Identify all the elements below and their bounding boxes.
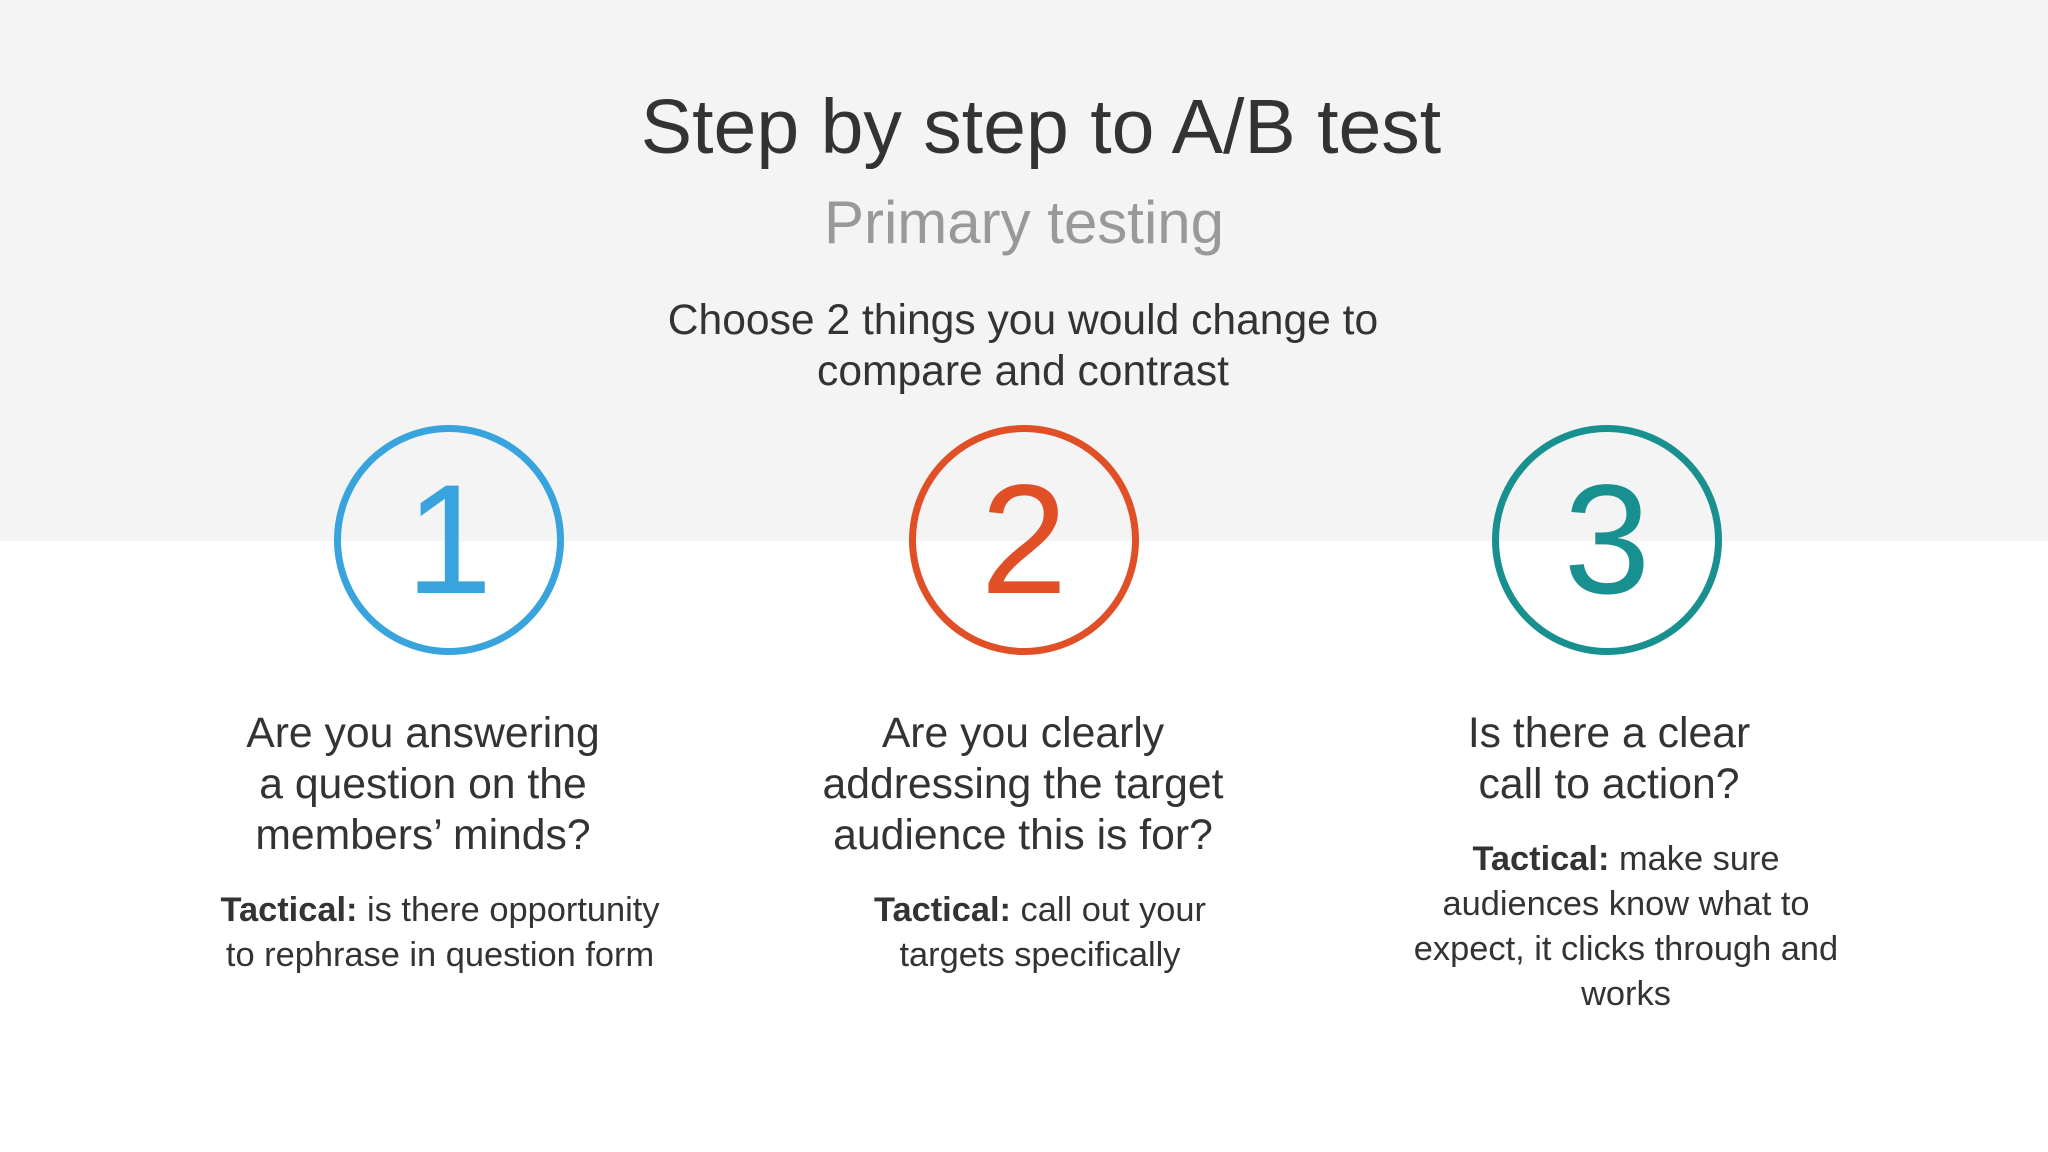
step 1 question: a question on the [259, 760, 587, 808]
step 1 question: Are you answering [246, 709, 600, 757]
step 2 circle [909, 425, 1139, 655]
step 3 circle [1492, 425, 1722, 655]
step 3 question: call to action? [1478, 760, 1740, 808]
step 3 tactical [1414, 840, 1838, 1013]
step 1 tactical: Tactical: is there opportunity [220, 891, 660, 929]
step 1 question: members’ minds? [255, 811, 591, 859]
step 3 tactical: works [1581, 975, 1671, 1013]
step 1 tactical [220, 891, 660, 974]
step 2 tactical: Tactical: call out your [874, 891, 1206, 929]
step 3 tactical: expect, it clicks through and [1414, 930, 1838, 968]
step 3 tactical: audiences know what to [1442, 885, 1810, 923]
step 3 question: Is there a clear [1468, 709, 1750, 757]
step 3 circle: 3 [1564, 453, 1650, 627]
title: Step by step to A/B test [641, 84, 1441, 170]
step 2 question [822, 709, 1224, 859]
step 3 tactical: Tactical: make sure [1472, 840, 1780, 878]
step 1 question [246, 709, 600, 859]
step 1 circle [334, 425, 564, 655]
intro text: compare and contrast [817, 347, 1229, 395]
step 2 circle: 2 [981, 453, 1067, 627]
intro text [668, 296, 1378, 395]
step 2 tactical: targets specifically [900, 936, 1180, 974]
step 1 circle: 1 [406, 453, 492, 627]
step 1 tactical: to rephrase in question form [226, 936, 654, 974]
step 2 question: Are you clearly [882, 709, 1164, 757]
step 3 question [1468, 709, 1750, 808]
subtitle: Primary testing [824, 189, 1224, 256]
step 2 question: audience this is for? [833, 811, 1213, 859]
step 2 tactical [874, 891, 1206, 974]
intro text: Choose 2 things you would change to [668, 296, 1378, 344]
step 2 question: addressing the target [822, 760, 1224, 808]
